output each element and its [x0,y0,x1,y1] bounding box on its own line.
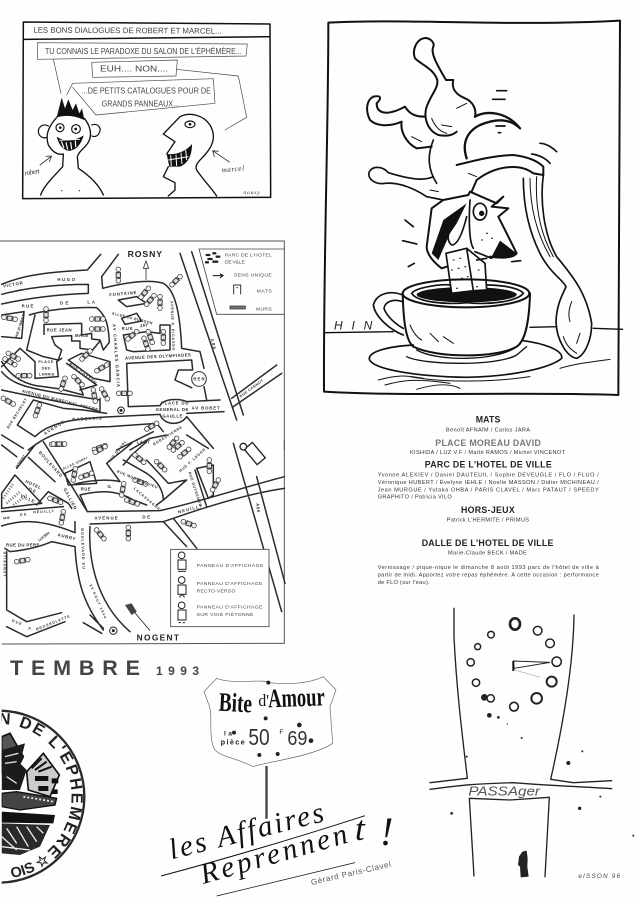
sign title [218,681,325,718]
street labels: AV CHARLES GARCIA [112,324,121,388]
dog body and legs [367,38,543,200]
section: Parc de l'Hotel de Ville [378,460,599,501]
arrow and name: marcel [213,151,244,174]
handwritten slogan: ! [380,809,393,854]
street labels [2,439,261,632]
map legend: top: MURS [256,306,272,312]
sign holes [232,681,313,757]
street labels: BROSSOLETTE [36,614,71,632]
vernissage note: partir de midi. Apportez votre repas éphémère. A cette occasion : performance [378,573,599,579]
round stamp: Salon de l'éphémère [2,710,86,884]
street labels: STIAUNOT [2,552,6,577]
vernissage note: Vernissage / pique-nique le dimanche 8 août 1993 parc de l'hôtel de ville à [378,565,600,571]
sign shield [204,677,336,767]
street labels: AVENUE DES OLYMPIADES [125,352,191,361]
sign price: 50 [248,724,270,750]
section: Mats: Benoît AFNAÏM / Carlos JARA [446,427,530,434]
street labels: ALLEE DU BUISSON [111,311,153,325]
stamp lettering: N DE L'EPHEMERE [2,712,83,859]
coffee cup [373,279,530,355]
map of Rosny to Nogent, lower part [2,439,285,644]
signature: eISSON 96 [578,873,620,880]
street labels: RUE JEAN [47,328,72,333]
map legend: top: PARC DE L'HOTEL [225,252,272,258]
sign price: 69 [287,728,307,750]
vernissage note [378,565,600,586]
speech bubble 3: ...DE PETITS CATALOGUES POUR DE [82,87,211,96]
section: Hors-jeux [447,505,529,523]
street labels: LUCIEN [37,531,51,542]
arrow and name: marcel: marcel [221,163,244,174]
sign price: pièce [221,737,245,746]
street labels: ROBESPIERRE [152,425,183,447]
section: Dalle de l'Hotel de Ville: DALLE DE L'HOTEL DE VILLE [422,538,554,548]
map legend: panel types: PANNEAU D'AFFICHAGE [197,581,263,587]
street labels: P. [28,627,33,632]
sign title: Amour [267,681,325,713]
street labels: RUE [11,619,23,626]
stamp engraving [2,733,59,855]
metro marker [118,407,124,414]
tiny standing figure [518,851,529,877]
street labels: ROBERT [15,454,27,469]
sign price [221,724,307,750]
sugar cube biscuit [446,248,487,293]
street labels: G. [107,484,111,489]
street labels: RUE CARNOT [239,378,265,398]
sign title: d' [258,691,269,710]
street labels: GAULLE [162,414,182,419]
section: Parc de l'Hotel de Ville: PARC DE L'HOTEL DE VILLE [425,460,552,470]
RER station [192,372,206,386]
clock numerals [467,618,561,711]
comic panel: Robert and Marcel dialogue [23,22,271,199]
street labels: VICTOR [3,280,24,289]
date: TEMBRE 1993: TEMBRE [10,656,140,680]
city label: ROSNY with arrow: ROSNY [128,249,162,259]
sign title: Bite [218,687,253,718]
street labels: DE [142,515,150,520]
street labels: BOULEVARD [38,450,64,478]
clock hands [512,661,550,677]
map legend: panel types: RECTO-VERSO [197,588,235,594]
speech bubble 2 [92,60,247,130]
street labels: RUE [81,487,91,492]
street labels: NEUILLY [33,509,55,514]
motion marks [403,91,557,267]
map legend: panel types [171,549,269,627]
sign post [265,766,268,819]
date: TEMBRE 1993: 1993 [156,664,199,678]
handwritten slogan: t [355,809,366,848]
speech bubble 2: EUH.... NON.... [100,64,168,73]
street labels: NEUILLY [177,503,203,515]
metro marker [110,627,117,634]
map legend: panel types: PANNEAU D'AFFICHAGE [197,563,264,569]
section: Place Moreau David: KISHIDA / LUZ V.F / Maïté RAMOS / Michel VINCENOT [410,450,566,456]
panel frame [23,22,271,199]
street labels: RUE DUTREMER [187,471,202,507]
section: Parc de l'Hotel de Ville: GRAPHITO / Patricia VILO [378,495,452,501]
vernissage note: de FLO (sur l'eau). [378,580,430,586]
street labels: DE [60,301,68,306]
street labels: LACASSAGNE [133,487,161,512]
street labels: DE [28,486,37,494]
streets [2,254,224,450]
arrow and name: robert [24,156,52,177]
panel markers [14,439,222,565]
street labels: PLACE [38,360,54,364]
building near A86 [240,442,265,465]
saucer [369,341,610,389]
illustration: PASSAger clock [430,608,634,880]
section: Dalle de l'Hotel de Ville [422,538,554,557]
street labels: LANT [137,439,150,444]
cup coffee surface [417,287,517,302]
section: Place Moreau David [410,438,566,456]
map legend: top: SENS UNIQUE [234,273,272,279]
street labels: A86 [210,338,217,350]
street labels: GALLIEN [62,487,78,510]
section: Mats [446,414,530,434]
street labels: AVENUE [94,516,118,521]
compass arrow to Nogent [125,603,150,631]
map legend: top: DE VILLE [225,260,246,266]
street labels: PLACE DU [161,400,188,405]
street labels: FONTAINE [109,290,137,297]
section: Hors-jeux: HORS-JEUX [461,505,515,515]
street labels: DE [20,512,27,517]
street labels: GENERAL DE [156,407,188,412]
street labels: RUE F. LEGER [179,448,206,473]
artist signature HIN: HIN [334,318,373,332]
street labels: RUE J.P. TIMBAUD [14,312,26,338]
streets [2,442,285,637]
sign price: F [279,729,283,736]
signature: nousy [243,190,260,196]
street labels: AUBRY [57,532,76,541]
section: Mats: MATS [476,414,501,424]
arrow and name: robert: robert [24,166,41,177]
street labels: LARRIS [39,372,55,376]
street labels [3,277,265,447]
map frame bottom [2,440,284,644]
map of Rosny to Nogent, upper part [0,241,284,453]
section: Parc de l'Hotel de Ville: Véronique HUBERT / Évelyne IEHLE / Noelle MASSON / Didier MICHINEAU / [378,479,599,486]
street labels: DES [42,366,51,370]
map legend: panel types: SUR VOIE PIÉTONNE [197,611,254,618]
sign: Bite d'Amour [161,677,393,896]
section: Parc de l'Hotel de Ville: Yvonne ALEXIEV / Daniel DAUTEUIL / Sophie DEVEUGLE / FLO / FLUO / [378,473,599,479]
section: Hors-jeux: Patrick L'HERMITE / PRIMUS [447,517,529,523]
map legend: panel types: PANNEAU D'AFFICHAGE [197,605,263,611]
handwritten slogan: les Affaires [166,797,327,866]
panel markers [0,267,184,453]
date: TEMBRE 1993 [10,656,199,680]
illustration frame [324,21,620,395]
street labels: 25 AOUT 1944 [88,584,107,620]
street labels: RUE [22,304,33,309]
building lines [430,608,612,877]
street labels: AVENUE DU MARECHAL JOFFRE [21,388,99,412]
PASSAger label: PASSAger [468,784,541,798]
street labels: MACE [75,333,88,338]
speech bubble 1: TU CONNAIS LE PARADOXE DU SALON DE L'ÉPHÉMÈRE... [45,47,242,56]
RER station: RER [193,377,206,382]
street labels: AV BOBET [192,405,220,410]
hatched park near Hotel de Ville [3,483,27,505]
speech bubble 3: GRANDS PANNEAUX... [102,99,179,108]
street labels: RUE BECHELET [6,397,28,430]
dog head [427,192,517,268]
table line [324,327,623,333]
street labels: VILLE [20,493,35,504]
street labels: LA [87,299,96,304]
section: Place Moreau David: PLACE MOREAU DAVID [435,438,541,448]
section: Dalle de l'Hotel de Ville: Marie-Claude BECK / MADE [448,551,527,557]
street labels: BOULEVARD DU [80,528,85,569]
street labels: ALLEE GORKI [62,456,88,471]
spoon [523,175,592,358]
city label: NOGENT: NOGENT [137,632,179,642]
city label: ROSNY with arrow [128,249,162,280]
handwritten slogan [161,797,393,896]
street labels: RUE DU PERE [6,542,39,547]
street labels: AVENUE [43,419,65,436]
character: Robert [38,98,103,195]
stamp ring [0,711,84,883]
artists list [378,414,600,586]
author credit: Gérard Paris-Clavel [310,860,392,887]
speech bubble 3 [67,79,215,115]
street labels: JAY [139,322,148,328]
street labels: RUE [3,516,11,520]
ink spots [450,694,634,837]
illustration: dog diving into coffee cup [324,21,623,395]
street labels: A86 [255,503,261,513]
street labels: RUE COTTON [68,362,98,385]
sign price: la [224,731,232,738]
motorway A86 [180,252,282,420]
character: Marcel [163,114,217,196]
comic heading: LES BONS DIALOGUES DE ROBERT ET MARCEL... [33,26,222,36]
street labels: RABELAIS [72,415,102,422]
map legend: top [199,249,284,314]
street labels: AVENUE P. PICASSO [170,301,175,350]
street labels: RUE DU VAL [108,439,128,463]
stamp lettering: OIS ☆ [11,856,48,878]
street labels: RUE MONTESQUIEU [116,470,158,490]
section: Parc de l'Hotel de Ville: Jean MURGUE / Yutaka OHBA / PARIS CLAVEL / Marc PATAUT / SPEEDY [378,487,599,493]
map legend: top: MATS [257,289,272,295]
map frame [0,241,284,450]
handwritten slogan: Reprennen [195,818,351,891]
street labels: HUGO [57,277,76,282]
street labels: RUE [122,326,133,331]
street labels: HOTEL [25,479,42,490]
speech bubble 1 [37,43,247,93]
